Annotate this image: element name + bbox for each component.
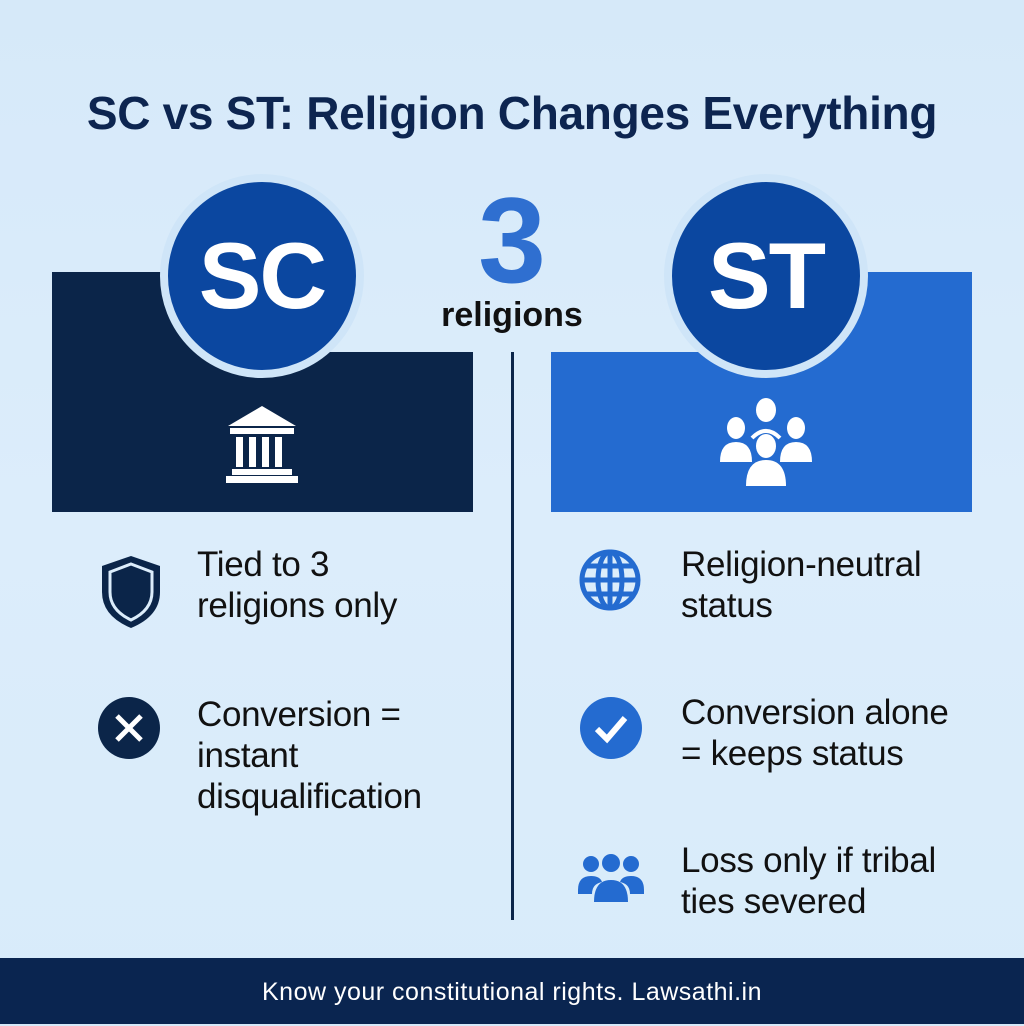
icon: building [226,406,298,483]
label religions: religions [441,296,583,334]
icon: people group [720,398,812,486]
title: SC vs ST: Religion Changes Everything [87,87,937,139]
item: group: ties severed [681,882,866,921]
item: x: instant [197,736,298,775]
item: group [578,841,936,921]
item: check: = keeps status [681,734,903,773]
item: x: disqualification [197,777,422,816]
item: shield: Tied to 3 [197,545,329,584]
panel: SC [52,272,473,512]
ST circle [664,174,868,378]
item: globe: Religion-neutral [681,545,921,584]
item: check [580,693,949,773]
item: shield [102,545,398,628]
SC circle: SC [199,223,325,328]
item: shield: religions only [197,586,397,625]
footer [0,958,1024,1024]
item: x: Conversion = [197,695,401,734]
item: globe [580,545,921,625]
item: check: Conversion alone [681,693,949,732]
big number 3: 3 [478,172,546,308]
item: group: Loss only if tribal [681,841,936,880]
SC circle [160,174,364,378]
panel: ST [551,272,972,512]
ST circle: ST [708,223,824,328]
item: x [98,695,422,816]
item: globe: status [681,586,773,625]
divider [511,352,514,920]
footer: Know your constitutional rights. Lawsathi.in [262,978,762,1006]
